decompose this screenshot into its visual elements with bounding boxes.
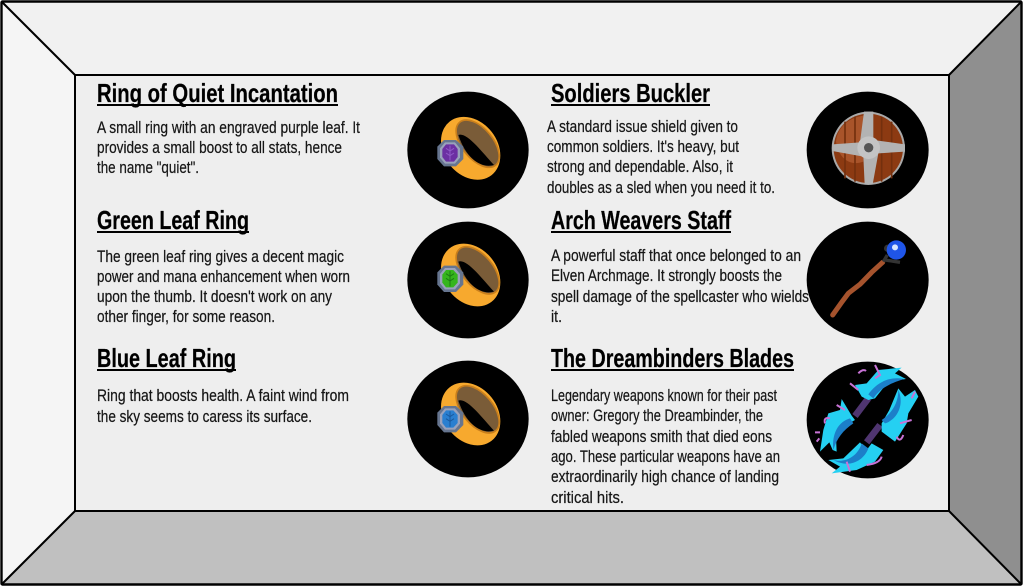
item text: The Dreambinders Blades: ago. These particular weapons have an — [551, 448, 780, 466]
item text: Arch Weavers Staff: A powerful staff that once belonged to an — [551, 247, 801, 265]
item text: Green Leaf Ring: other finger, for some reason. — [97, 308, 275, 326]
item text: The Dreambinders Blades: The Dreambinders Blades — [551, 343, 794, 373]
item text: Green Leaf Ring: upon the thumb. It doesn't work on any — [97, 288, 333, 306]
item text: Soldiers Buckler: common soldiers. It's heavy, but — [547, 138, 739, 156]
item text: Green Leaf Ring: Green Leaf Ring — [97, 205, 249, 235]
item text: Blue Leaf Ring: Blue Leaf Ring — [97, 343, 236, 373]
icon: purple leaf ring — [407, 92, 529, 208]
item text: Ring of Quiet Incantation — [97, 78, 360, 177]
icon: shield — [807, 92, 929, 208]
item text: The Dreambinders Blades: extraordinarily high chance of landing — [551, 468, 779, 486]
item text: Blue Leaf Ring: Ring that boosts health. A faint wind from — [97, 387, 349, 405]
item text: Green Leaf Ring — [97, 205, 350, 326]
item text: The Dreambinders Blades — [551, 343, 794, 507]
item text: Arch Weavers Staff — [551, 205, 809, 326]
item text: The Dreambinders Blades: owner: Gregory the Dreambinder, the — [551, 407, 763, 425]
item text: Arch Weavers Staff: spell damage of the spellcaster who wields — [551, 288, 809, 306]
icon: twin blades — [807, 362, 929, 478]
item text: Green Leaf Ring: The green leaf ring gives a decent magic — [97, 248, 344, 266]
item text: The Dreambinders Blades: fabled weapons smith that died eons — [551, 428, 772, 446]
icon: staff — [807, 222, 929, 338]
item text: Ring of Quiet Incantation: provides a small boost to all stats, hence — [97, 139, 342, 157]
item text: Ring of Quiet Incantation: A small ring with an engraved purple leaf. It — [97, 119, 360, 137]
item text: Ring of Quiet Incantation: the name "quiet". — [97, 159, 199, 177]
icon: blue leaf ring — [407, 361, 529, 477]
item text: Soldiers Buckler: strong and dependable. Also, it — [547, 158, 733, 176]
item text: Arch Weavers Staff: Arch Weavers Staff — [551, 205, 731, 235]
item text: Blue Leaf Ring: the sky seems to caress its surface. — [97, 408, 312, 426]
icon: green leaf ring — [407, 222, 529, 338]
item text: Blue Leaf Ring — [97, 343, 349, 426]
item text: The Dreambinders Blades: critical hits. — [551, 489, 624, 507]
item text: Soldiers Buckler: doubles as a sled when you need it to. — [547, 179, 775, 197]
item text: Arch Weavers Staff: Elven Archmage. It strongly boosts the — [551, 267, 782, 285]
item text: Soldiers Buckler: Soldiers Buckler — [551, 78, 710, 108]
item text: The Dreambinders Blades: Legendary weapons known for their past — [551, 387, 777, 405]
item text: Arch Weavers Staff: it. — [551, 308, 562, 326]
item text: Green Leaf Ring: power and mana enhancement when worn — [97, 268, 350, 286]
item text: Soldiers Buckler: A standard issue shield given to — [547, 118, 738, 136]
item text: Ring of Quiet Incantation: Ring of Quiet Incantation — [97, 78, 338, 108]
item text: Soldiers Buckler — [547, 78, 775, 197]
